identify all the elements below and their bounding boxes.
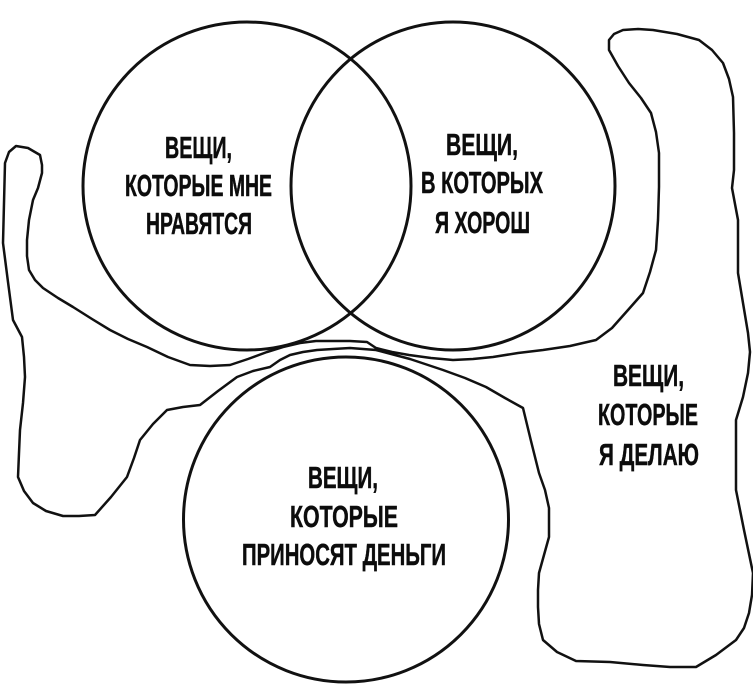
label: things that make money: ПРИНОСЯТ ДЕНЬГИ	[242, 537, 446, 572]
label: things that make money: ВЕЩИ,	[308, 460, 378, 495]
label: things I like	[125, 130, 272, 241]
label: things I am good at: ВЕЩИ,	[446, 127, 518, 162]
label: things I am good at: Я ХОРОШ	[435, 205, 530, 240]
label: things I do: ВЕЩИ,	[613, 358, 684, 393]
label: things I like: КОТОРЫЕ МНЕ	[125, 168, 272, 203]
circle: things I like	[83, 22, 411, 350]
label: things I do: Я ДЕЛАЮ	[599, 437, 699, 472]
label: things that make money	[242, 460, 446, 572]
label: things I do: КОТОРЫЕ	[598, 397, 698, 432]
label: things I like: ВЕЩИ,	[165, 130, 232, 165]
label: things I like: НРАВЯТСЯ	[146, 206, 252, 241]
circle: things I am good at	[291, 22, 615, 350]
label: things I do	[598, 358, 699, 472]
label: things I am good at	[421, 127, 543, 240]
circle: things that make money	[184, 357, 508, 682]
label: things I am good at: В КОТОРЫХ	[421, 165, 543, 200]
label: things that make money: КОТОРЫЕ	[290, 499, 398, 534]
